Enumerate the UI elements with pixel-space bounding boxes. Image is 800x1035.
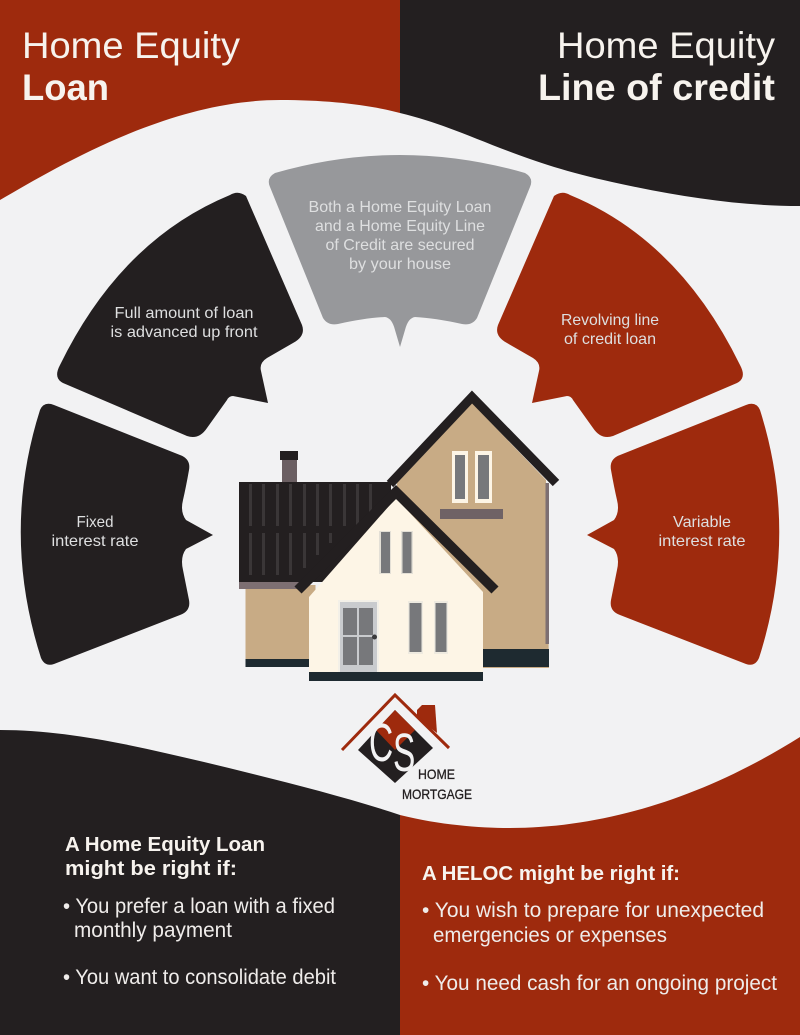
text block: HELOC suitability: A HELOC might be right if: [422, 863, 680, 885]
callout: full amount of loan: Full amount of loan [114, 305, 254, 322]
text block: home equity loan suitability: A Home Equity Loan [65, 834, 265, 856]
panel: top right dark header [400, 0, 800, 206]
callout: variable interest rate: interest rate [658, 533, 746, 550]
callout: grey shared bubble: of Credit are secured [326, 237, 474, 254]
callout: variable interest rate [587, 404, 779, 665]
heading: Home Equity Line of credit: Line of credit [538, 67, 775, 108]
callout: fixed interest rate [21, 404, 213, 665]
text block: HELOC suitability [422, 863, 777, 995]
callout: revolving line of credit: Revolving line [561, 312, 659, 329]
icon: house illustration [239, 397, 556, 681]
text block: HELOC suitability: • You need cash for an ongoing project [422, 972, 777, 995]
text block: home equity loan suitability: • You prefer a loan with a fixed [63, 895, 335, 918]
callout: fixed interest rate: interest rate [52, 533, 139, 550]
callout: grey shared bubble: Both a Home Equity Loan [308, 199, 492, 216]
callout: grey shared bubble: and a Home Equity Line [315, 218, 485, 235]
callout: fixed interest rate: Fixed [76, 514, 114, 531]
heading: Home Equity Line of credit [538, 25, 776, 108]
logo: CS Home Mortgage: HOME [418, 766, 455, 782]
callout: variable interest rate: Variable [673, 514, 731, 531]
text block: HELOC suitability: • You wish to prepare for unexpected [422, 899, 764, 922]
text block: HELOC suitability: emergencies or expenses [433, 924, 667, 947]
heading: Home Equity Loan: Home Equity [22, 25, 241, 66]
heading: Home Equity Loan: Loan [22, 67, 109, 108]
callout: full amount of loan: is advanced up front [110, 324, 258, 341]
callout: grey shared bubble: by your house [349, 256, 451, 273]
logo: CS Home Mortgage [342, 695, 472, 802]
logo: CS Home Mortgage: S [393, 722, 415, 783]
callout: revolving line of credit [497, 193, 743, 437]
heading: Home Equity Loan [22, 25, 241, 108]
logo: CS Home Mortgage: MORTGAGE [402, 786, 472, 802]
logo: CS Home Mortgage: C [369, 712, 393, 773]
text block: home equity loan suitability: • You want to consolidate debit [63, 966, 336, 989]
panel: bottom left dark section [0, 730, 400, 1035]
panel: top left red header [0, 0, 400, 200]
text block: home equity loan suitability: monthly payment [74, 919, 232, 942]
heading: Home Equity Line of credit: Home Equity [557, 25, 776, 66]
text block: home equity loan suitability: might be right if: [65, 858, 237, 880]
callout: revolving line of credit: of credit loan [564, 331, 656, 348]
text block: home equity loan suitability [63, 834, 336, 989]
callout: grey shared bubble [269, 155, 531, 347]
callout: full amount of loan [57, 193, 303, 437]
panel: bottom right red section [400, 737, 800, 1035]
